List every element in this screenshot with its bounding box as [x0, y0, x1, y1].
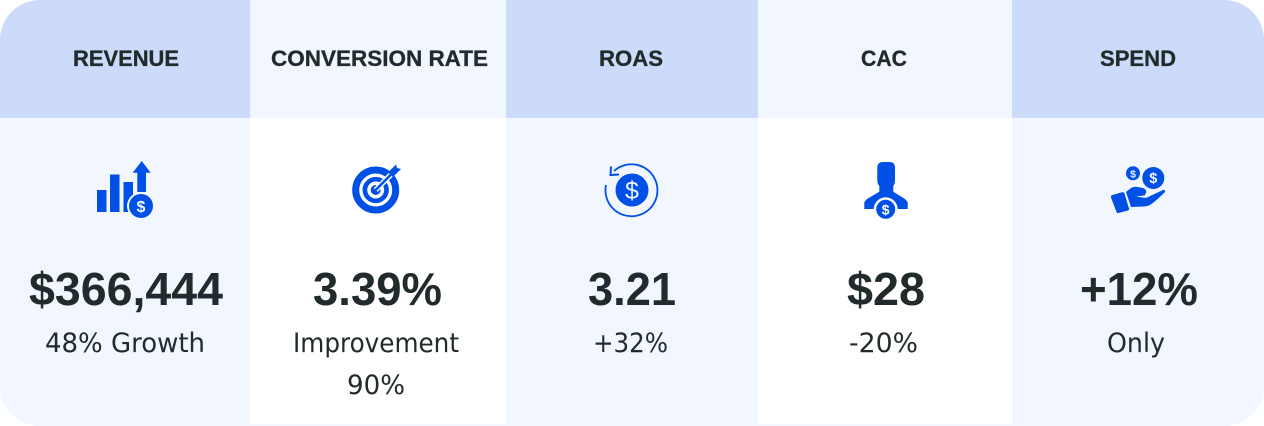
heading: revenue: REVENUE [73, 46, 179, 71]
column: cac [847, 46, 925, 359]
heading: conversion rate: CONVERSION RATE [271, 46, 488, 71]
note: conversion improvement: Improvement [293, 328, 459, 359]
icon: circular arrow around dollar coin: $ [625, 177, 639, 205]
icon: rising bars with dollar coin: $ [137, 199, 146, 216]
note: cac change: -20% [849, 328, 918, 359]
icon: hand holding coins: $ [1130, 168, 1136, 180]
note: revenue growth: 48% Growth [45, 328, 205, 359]
icon: person with dollar coin [864, 162, 908, 221]
value: spend: +12% [1080, 263, 1198, 315]
note: spend qualifier: Only [1107, 328, 1165, 359]
icon: rising bars with dollar coin [97, 161, 155, 220]
value: conversion rate: 3.39% [313, 263, 442, 315]
heading: roas: ROAS [599, 46, 663, 71]
note: roas change: +32% [593, 328, 668, 359]
column: spend [1080, 46, 1198, 359]
heading: spend: SPEND [1100, 46, 1176, 71]
icon: person with dollar coin: $ [882, 202, 890, 218]
heading: cac: CAC [861, 46, 907, 71]
value: roas: 3.21 [588, 263, 676, 315]
note: improvement percent: 90% [347, 370, 405, 401]
value: cac: $28 [847, 263, 925, 315]
icon: target with arrow [356, 164, 401, 210]
icon: hand holding coins [1111, 166, 1165, 213]
column: conversion rate [271, 46, 488, 401]
value: revenue: $366,444 [29, 263, 223, 315]
column: revenue [29, 46, 223, 359]
icon: circular arrow around dollar coin [605, 164, 657, 216]
column: roas [588, 46, 676, 359]
icon: hand holding coins: $ [1149, 171, 1157, 187]
